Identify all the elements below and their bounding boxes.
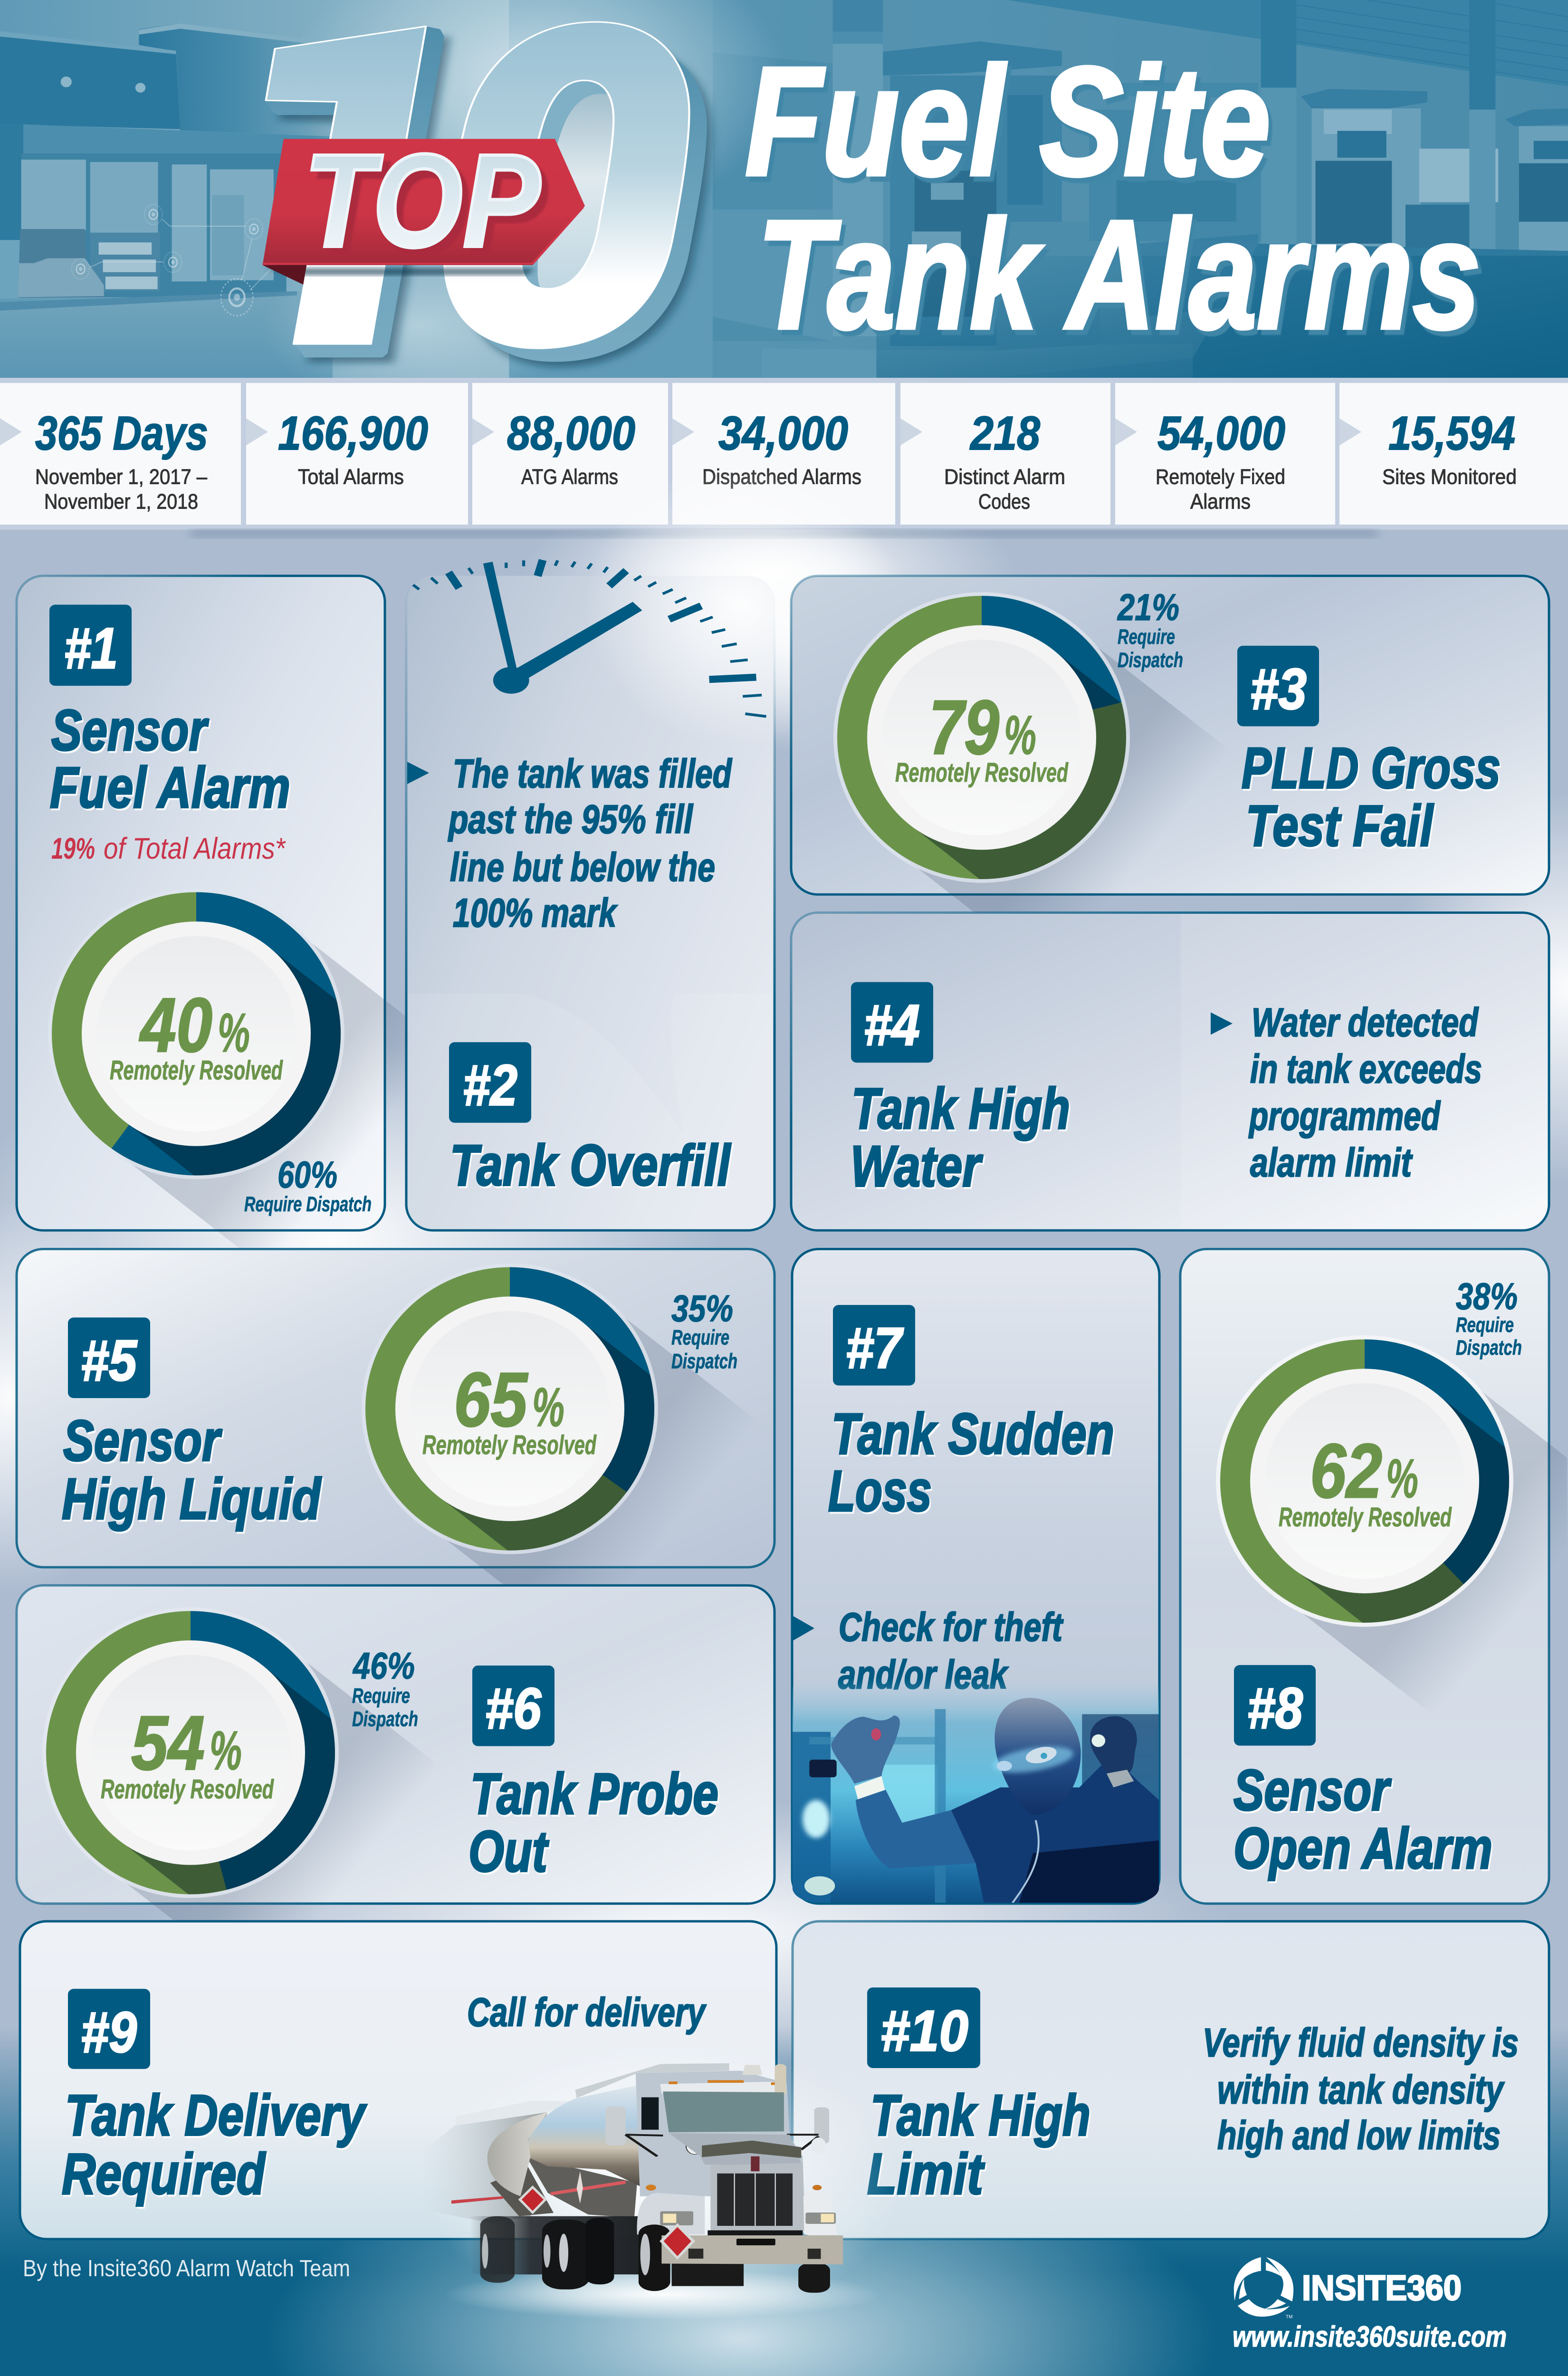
donut chart 40 / 60: 40 (139, 982, 212, 1068)
stat: ATG alarms (472, 383, 668, 525)
heading: Sensor (51, 699, 209, 763)
bricks (1089, 110, 1263, 241)
heading: Sensor (63, 1409, 222, 1473)
arrow bullet (793, 1616, 814, 1641)
stat: remotely fixed alarms: 54,000 (1157, 407, 1285, 460)
pump 1 (876, 41, 1062, 76)
badge #4: #4 (864, 993, 920, 1058)
forecourt backdrop (713, 0, 1568, 378)
dispatch label: Require (352, 1685, 410, 1707)
heading: Limit (867, 2142, 985, 2206)
badge #9 (68, 1989, 150, 2069)
heading: Tank Overfill (450, 1133, 731, 1198)
stat: distinct alarm codes: Codes (978, 490, 1030, 513)
dispatch label: Dispatch (352, 1708, 418, 1731)
stat: ATG alarms: ATG Alarms (521, 466, 618, 489)
badge #7 (833, 1305, 915, 1386)
stat: dispatched alarms: 34,000 (718, 407, 848, 460)
description: alarm limit (1250, 1140, 1413, 1185)
heading: Test Fail (1246, 794, 1434, 858)
heading: Tank High (870, 2083, 1090, 2148)
donut chart 62 / 38: 62 (1310, 1428, 1382, 1514)
stat: 365 days (0, 383, 241, 525)
dispatch label (1456, 1275, 1522, 1360)
donut chart 54 / 46: % (210, 1720, 242, 1781)
storefront backdrop (0, 0, 509, 378)
stat: 365 days: November 1, 2018 (44, 490, 198, 513)
heading (867, 2083, 1090, 2206)
description: and/or leak (838, 1653, 1009, 1697)
badge #1: #1 (64, 616, 118, 681)
badge #5 (68, 1318, 150, 1398)
heading: Open Alarm (1233, 1816, 1492, 1881)
dispatch label: 46% (352, 1645, 415, 1686)
badge #3: #3 (1250, 657, 1307, 722)
badge #10 (867, 1987, 980, 2068)
donut chart 79 / 21 (833, 592, 1239, 978)
dispatch label (671, 1287, 737, 1373)
heading (1242, 736, 1501, 858)
badge #2: #2 (463, 1054, 517, 1118)
donut chart 65 / 35 (362, 1264, 767, 1649)
island and ground (762, 344, 1193, 378)
stat: remotely fixed alarms: Alarms (1190, 490, 1251, 513)
description: The tank was filled (453, 752, 733, 796)
dispatch label: 35% (671, 1287, 733, 1329)
heading: Sensor (1233, 1758, 1392, 1823)
credit line: By the Insite360 Alarm Watch Team (23, 2256, 350, 2281)
panel 4: tank high water (791, 913, 1549, 1230)
stat: 365 days: November 1, 2017 – (35, 466, 207, 489)
stat: ATG alarms: 88,000 (507, 407, 635, 460)
description: programmed (1248, 1094, 1441, 1139)
donut chart 79 / 21: 79 (929, 684, 999, 770)
stat: distinct alarm codes: Distinct Alarm (944, 466, 1065, 489)
panel 10: tank high limit (793, 1921, 1549, 2239)
stat: sites monitored: Sites Monitored (1382, 466, 1517, 489)
stat: dispatched alarms (672, 383, 895, 525)
panel 5: sensor high liquid (17, 1249, 774, 1649)
title: Fuel Site (745, 35, 1271, 208)
logo: Insite360: INSITE360 (1302, 2268, 1462, 2308)
stat: total alarms (246, 383, 468, 525)
stat: 365 days: 365 Days (35, 407, 208, 460)
arrow bullet (1211, 1012, 1233, 1035)
description (448, 752, 733, 936)
share of total alarms: of Total Alarms* (104, 832, 286, 865)
description (838, 1605, 1064, 1697)
donut chart 65 / 35: Remotely Resolved (422, 1430, 597, 1460)
donut chart 65 / 35: % (532, 1376, 564, 1438)
panel 7: tank sudden loss (792, 1249, 1159, 1904)
heading: High Liquid (62, 1467, 322, 1532)
logo: Insite360: TM (1286, 2315, 1292, 2319)
clock gauge (413, 560, 766, 717)
description: past the 95% fill (448, 797, 694, 842)
dispatch label: 60% (277, 1154, 337, 1196)
dispatch label: Dispatch (671, 1350, 737, 1373)
dispatch label: Require (671, 1326, 729, 1349)
heading (62, 2083, 367, 2206)
badge #10: #10 (880, 1999, 968, 2063)
dispatch label: Dispatch (1118, 649, 1183, 672)
donut chart 40 / 60: Remotely Resolved (110, 1055, 283, 1085)
donut chart 79 / 21: % (1004, 704, 1036, 766)
badge #9: #9 (81, 2001, 137, 2065)
heading: Out (468, 1820, 549, 1884)
donut chart 79 / 21: Remotely Resolved (895, 758, 1069, 788)
description: 100% mark (453, 891, 618, 936)
arrow bullet (407, 762, 429, 784)
dispatch label: Require Dispatch (244, 1193, 372, 1216)
website url: www.insite360suite.com (1233, 2321, 1507, 2353)
heading: Required (62, 2142, 266, 2206)
heading: Tank Delivery (65, 2083, 367, 2148)
dispatch label: Require (1118, 625, 1175, 649)
share of total alarms (51, 832, 286, 865)
heading: Fuel Alarm (50, 756, 290, 820)
donut chart 54 / 46 (42, 1607, 448, 1993)
heading: Tank High (851, 1077, 1070, 1141)
TOP ribbon: TOP (304, 126, 541, 275)
donut chart 62 / 38: % (1386, 1447, 1418, 1509)
heading: Water (851, 1134, 983, 1199)
heading (1233, 1758, 1492, 1881)
donut chart 40 / 60: % (218, 1002, 250, 1063)
description (1248, 1000, 1482, 1185)
panel 9: tank delivery required (20, 1921, 776, 2239)
stat: sites monitored: 15,594 (1388, 407, 1515, 460)
panel 3: PLLD gross test fail (791, 576, 1549, 978)
donut chart 54 / 46: 54 (131, 1700, 205, 1786)
stat: total alarms: Total Alarms (298, 466, 404, 489)
description (1203, 2021, 1519, 2158)
panel 6: tank probe out (17, 1585, 774, 1993)
stats strip (0, 378, 1568, 537)
canopy columns (833, 0, 883, 32)
badge #4 (851, 982, 933, 1063)
description: Check for theft (839, 1605, 1064, 1650)
donut chart 62 / 38 (1216, 1335, 1567, 1722)
badge #5: #5 (81, 1329, 137, 1393)
dispatch label: 21% (1117, 586, 1179, 628)
dispatch label (1117, 586, 1183, 672)
header banner with fuel-station photo backdrop (0, 0, 1568, 378)
illustration: fuel tanker truck (421, 2040, 902, 2326)
title (745, 35, 1481, 361)
heading: Tank Probe (470, 1762, 718, 1826)
panel 1: sensor fuel alarm (17, 576, 453, 1274)
badge #2 (449, 1042, 531, 1123)
heading: Tank Sudden (832, 1402, 1114, 1466)
heading (468, 1762, 718, 1884)
dispatch label (244, 1154, 372, 1216)
stat: remotely fixed alarms (1115, 383, 1335, 525)
dispatch label: 38% (1456, 1275, 1518, 1317)
description: Water detected (1252, 1000, 1479, 1045)
heading (50, 699, 290, 820)
stat: distinct alarm codes: 218 (969, 407, 1041, 460)
heading (828, 1402, 1114, 1523)
photo: masked thief at a lock (793, 1679, 1159, 1903)
stat: sites monitored (1339, 383, 1568, 525)
donut chart 40 / 60 (48, 889, 453, 1274)
badge #3 (1237, 646, 1319, 726)
donut chart 62 / 38: Remotely Resolved (1279, 1502, 1452, 1533)
logo: Insite360 (1234, 2257, 1462, 2319)
badge #6: #6 (485, 1677, 542, 1741)
badge #8: #8 (1247, 1676, 1303, 1741)
big numeral 10 (266, 22, 712, 367)
stat: distinct alarm codes (900, 383, 1110, 525)
dispatch label: Require (1456, 1313, 1514, 1337)
description: Call for delivery (467, 1990, 707, 2035)
stat: dispatched alarms: Dispatched Alarms (702, 466, 861, 489)
heading: Loss (828, 1459, 932, 1523)
description: in tank exceeds (1250, 1047, 1482, 1092)
heading (851, 1077, 1070, 1199)
badge #6 (472, 1666, 555, 1746)
donut chart 65 / 35: 65 (454, 1356, 528, 1443)
donut chart 54 / 46: Remotely Resolved (101, 1774, 274, 1804)
badge #7: #7 (846, 1316, 904, 1380)
description: line but below the (450, 845, 715, 890)
heading (62, 1409, 322, 1532)
dispatch label: Dispatch (1456, 1336, 1522, 1360)
stat: remotely fixed alarms: Remotely Fixed (1156, 466, 1285, 489)
stat: total alarms: 166,900 (278, 407, 428, 460)
panel 8: sensor open alarm (1180, 1249, 1567, 1904)
pump 2 (1301, 89, 1427, 108)
panel 2: tank overfill (406, 466, 898, 1230)
pump 3 (1505, 108, 1568, 126)
share of total alarms: 19% (51, 832, 95, 865)
dispatch label (352, 1645, 418, 1731)
badge #1 (49, 605, 132, 686)
badge #8 (1234, 1665, 1316, 1746)
